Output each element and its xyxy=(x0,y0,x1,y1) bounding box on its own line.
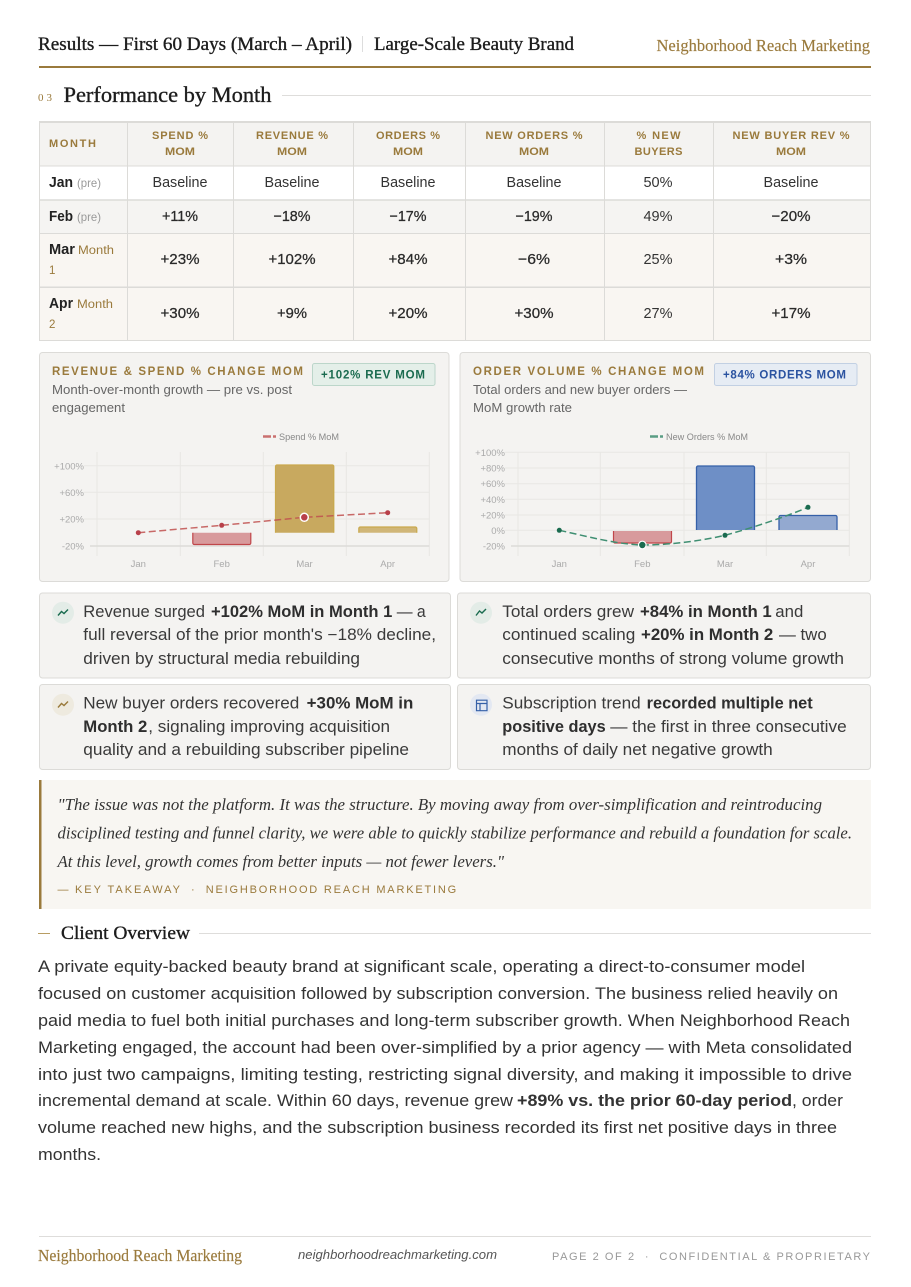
bar and line chart: order volume xyxy=(475,448,849,570)
row: Apr xyxy=(49,296,811,331)
row: Jan: Baseline xyxy=(506,175,562,191)
icon: gold trend line xyxy=(52,694,74,716)
row: Mar: 1 xyxy=(49,265,55,277)
insight text: — two xyxy=(779,626,827,644)
client overview paragraph xyxy=(38,958,852,1164)
insight text: recorded multiple net xyxy=(647,695,813,713)
badge: +84% orders mom xyxy=(714,364,857,386)
panel: order volume chart xyxy=(460,352,870,582)
insight text: +20% in Month 2 xyxy=(641,626,773,644)
table header row: MOM xyxy=(393,146,423,158)
table header row: NEW BUYER REV % xyxy=(732,130,850,142)
bar and line chart: revenue vs spend: Apr xyxy=(380,559,395,570)
chart title: REVENUE & SPEND % CHANGE MOM xyxy=(52,366,303,378)
client overview paragraph: incremental demand at scale. Within 60 days, revenue grew xyxy=(38,1092,513,1110)
bar and line chart: revenue vs spend: +20% xyxy=(59,514,85,526)
section heading: performance by month: Performance by Month xyxy=(64,82,272,107)
badge: +102% rev mom: +102% REV MOM xyxy=(321,370,425,382)
bar and line chart: order volume: Jan xyxy=(552,559,567,570)
row: Feb: (pre) xyxy=(77,210,101,224)
row: Feb xyxy=(49,209,811,225)
insight card: total orders grew xyxy=(458,593,870,678)
insight card: new buyer orders xyxy=(40,684,450,770)
row: Feb: −20% xyxy=(772,209,811,225)
row: Apr: +30% xyxy=(160,306,200,322)
row: Jan: Baseline xyxy=(152,175,208,191)
row: Apr: Apr xyxy=(49,296,73,312)
performance table xyxy=(39,122,871,341)
row: Feb: Feb xyxy=(49,209,73,225)
table header row: MOM xyxy=(165,146,195,158)
insight text xyxy=(83,603,436,668)
chart subtitle: Total orders and new buyer orders — xyxy=(473,382,687,397)
row: Feb: −18% xyxy=(274,209,311,225)
client overview paragraph: paid media to fuel both initial purchases and long-term subscriber growth. When Neighborhood Reach xyxy=(38,1012,850,1030)
chart subtitle: engagement xyxy=(52,400,125,415)
row: Apr: +30% xyxy=(514,306,554,322)
section heading: performance by month xyxy=(38,82,871,107)
client overview paragraph: +89% vs. the prior 60-day period xyxy=(517,1092,792,1110)
bar and line chart: order volume: Apr xyxy=(801,559,815,570)
section heading: client overview: Client Overview xyxy=(61,923,190,944)
client overview paragraph: , order xyxy=(792,1092,844,1110)
badge: +102% rev mom xyxy=(312,364,435,386)
bar and line chart: revenue vs spend xyxy=(54,452,429,570)
quote attribution: KEY TAKEAWAY xyxy=(75,884,181,896)
insight text xyxy=(83,695,413,759)
table header row: MOM xyxy=(776,146,806,158)
page header xyxy=(38,35,871,68)
bar and line chart: revenue vs spend: Feb xyxy=(214,559,230,570)
quote text: "The issue was not the platform. It was the structure. By moving away from over-simplification and reintroducing xyxy=(58,795,822,814)
chart legend: Spend % MoM xyxy=(279,432,339,442)
row: Jan: (pre) xyxy=(77,176,101,190)
bar and line chart: order volume: +100% xyxy=(475,448,506,459)
insight text: Total orders grew xyxy=(502,603,634,621)
insight text: positive days xyxy=(502,718,606,736)
callout: key takeaway quote xyxy=(39,780,871,909)
row: Mar: +84% xyxy=(388,252,428,268)
insight text: full reversal of the prior month's −18% decline, xyxy=(83,626,436,644)
insight text: Revenue surged xyxy=(83,603,205,621)
table header row xyxy=(49,130,850,158)
insight text: — the first in three consecutive xyxy=(610,718,847,736)
table header row: % NEW xyxy=(636,130,681,142)
chart subtitle xyxy=(52,382,292,415)
row: Mar: −6% xyxy=(518,252,550,268)
bar and line chart: order volume: +40% xyxy=(480,495,506,506)
page footer: PAGE 2 OF 2 · CONFIDENTIAL & PROPRIETARY xyxy=(552,1251,871,1263)
insight text: , signaling improving acquisition xyxy=(148,718,390,736)
insight text: quality and a rebuilding subscriber pipeline xyxy=(83,741,409,759)
insight card: subscription trend xyxy=(458,684,870,770)
chart legend: New Orders % MoM xyxy=(666,432,748,442)
bar and line chart: order volume: Feb xyxy=(634,559,650,570)
row: Mar: 25% xyxy=(644,252,673,268)
bar and line chart: revenue vs spend: Mar xyxy=(296,559,313,570)
insight text: — a xyxy=(397,603,426,621)
panel: revenue and spend chart xyxy=(40,352,449,582)
icon: green trend line xyxy=(470,602,492,624)
table header row: MONTH xyxy=(49,138,96,150)
bar and line chart: revenue vs spend: -20% xyxy=(62,542,85,552)
row: Mar xyxy=(49,242,807,277)
table header row: ORDERS % xyxy=(376,130,440,142)
bar and line chart: order volume: 0% xyxy=(491,526,506,537)
client overview paragraph: into just two campaigns, limiting testing, restricting signal diversity, and making it impossible to drive xyxy=(38,1066,852,1084)
bar and line chart: order volume: -20% xyxy=(483,542,506,552)
row: Apr: +17% xyxy=(772,306,811,322)
row: Mar: +3% xyxy=(775,252,807,268)
bar and line chart: order volume: +60% xyxy=(480,479,506,490)
badge: +84% orders mom: +84% ORDERS MOM xyxy=(723,370,846,382)
row: Feb: −17% xyxy=(390,209,427,225)
row: Jan: 50% xyxy=(644,175,673,191)
insight text: Month 2 xyxy=(83,718,147,736)
insight text: and xyxy=(775,603,803,621)
row: Feb: 49% xyxy=(644,209,673,225)
row: Feb: +11% xyxy=(162,209,198,225)
client overview paragraph: Marketing engaged, the account had been over-simplified by a prior agency — with Meta consolidated xyxy=(38,1039,852,1057)
page footer: Neighborhood Reach Marketing xyxy=(38,1246,242,1265)
table header row: REVENUE % xyxy=(256,130,328,142)
quote attribution: · xyxy=(191,884,195,896)
table header row: BUYERS xyxy=(634,146,682,158)
client overview paragraph: volume reached new highs, and the subscription business recorded its first net positive days in three xyxy=(38,1119,837,1137)
insight text xyxy=(502,695,847,759)
quote text: disciplined testing and funnel clarity, we were able to quickly stabilize performance and rebuild a foundation for scale. xyxy=(58,824,852,842)
row: Apr: 27% xyxy=(644,306,673,322)
page footer xyxy=(38,1236,871,1265)
table header row: MOM xyxy=(519,146,549,158)
client overview paragraph: A private equity-backed beauty brand at significant scale, operating a direct-to-consumer model xyxy=(38,958,805,976)
row: Jan: Baseline xyxy=(380,175,436,191)
chart subtitle: Month-over-month growth — pre vs. post xyxy=(52,382,292,397)
bar and line chart: revenue vs spend: +60% xyxy=(59,488,85,499)
insight text: continued scaling xyxy=(502,626,635,644)
client overview paragraph: focused on customer acquisition followed by subscription conversion. The business relied heavily on xyxy=(38,985,838,1003)
table header row: NEW ORDERS % xyxy=(486,130,583,142)
bar and line chart: order volume: Mar xyxy=(717,559,733,570)
quote attribution: NEIGHBORHOOD REACH MARKETING xyxy=(206,884,456,896)
row: Mar: Month xyxy=(78,245,114,257)
bar and line chart: order volume: +80% xyxy=(480,464,506,474)
row: Mar: Mar xyxy=(49,242,75,258)
table header row: MOM xyxy=(277,146,307,158)
bar and line chart: order volume: +20% xyxy=(480,510,506,522)
page footer: neighborhoodreachmarketing.com xyxy=(298,1247,497,1262)
row: Apr: 2 xyxy=(49,319,55,331)
insight text: Subscription trend xyxy=(502,695,641,713)
row: Apr: Month xyxy=(77,299,113,311)
insight text: +30% MoM in xyxy=(307,695,413,713)
row: Mar: +23% xyxy=(160,252,200,268)
page header: Results — First 60 Days (March – April) xyxy=(38,35,352,55)
quote attribution xyxy=(58,884,456,896)
row: Mar: +102% xyxy=(268,252,316,268)
insight text: +84% in Month 1 xyxy=(640,603,772,621)
row: Jan: Baseline xyxy=(264,175,320,191)
quote text: At this level, growth comes from better inputs — not fewer levers." xyxy=(57,852,505,871)
insight text: consecutive months of strong volume growth xyxy=(502,650,844,668)
insight text: New buyer orders recovered xyxy=(83,695,299,713)
page header: Neighborhood Reach Marketing xyxy=(656,36,870,55)
chart title: ORDER VOLUME % CHANGE MOM xyxy=(473,366,704,378)
quote attribution: — xyxy=(58,884,68,896)
section heading: performance by month: 03 xyxy=(38,92,52,104)
icon: green trend line xyxy=(52,602,74,624)
insight text: driven by structural media rebuilding xyxy=(83,650,360,668)
row: Apr: +20% xyxy=(388,306,428,322)
insight card: revenue surged xyxy=(40,593,450,678)
quote text xyxy=(57,795,852,871)
insight text xyxy=(502,603,844,668)
bar and line chart: revenue vs spend: +100% xyxy=(54,462,85,472)
client overview paragraph: months. xyxy=(38,1146,101,1164)
page header: Large-Scale Beauty Brand xyxy=(374,35,575,55)
insight text: +102% MoM in Month 1 xyxy=(211,603,392,621)
icon: blue layout panel xyxy=(470,694,492,716)
row: Jan xyxy=(49,175,818,191)
chart subtitle xyxy=(473,382,687,415)
insight text: months of daily net negative growth xyxy=(502,741,773,759)
table header row: SPEND % xyxy=(152,130,208,142)
bar and line chart: revenue vs spend: Jan xyxy=(131,559,146,570)
row: Jan: Jan xyxy=(49,175,73,191)
row: Feb: −19% xyxy=(516,209,553,225)
row: Jan: Baseline xyxy=(764,175,818,191)
row: Apr: +9% xyxy=(277,306,307,322)
chart subtitle: MoM growth rate xyxy=(473,400,572,415)
